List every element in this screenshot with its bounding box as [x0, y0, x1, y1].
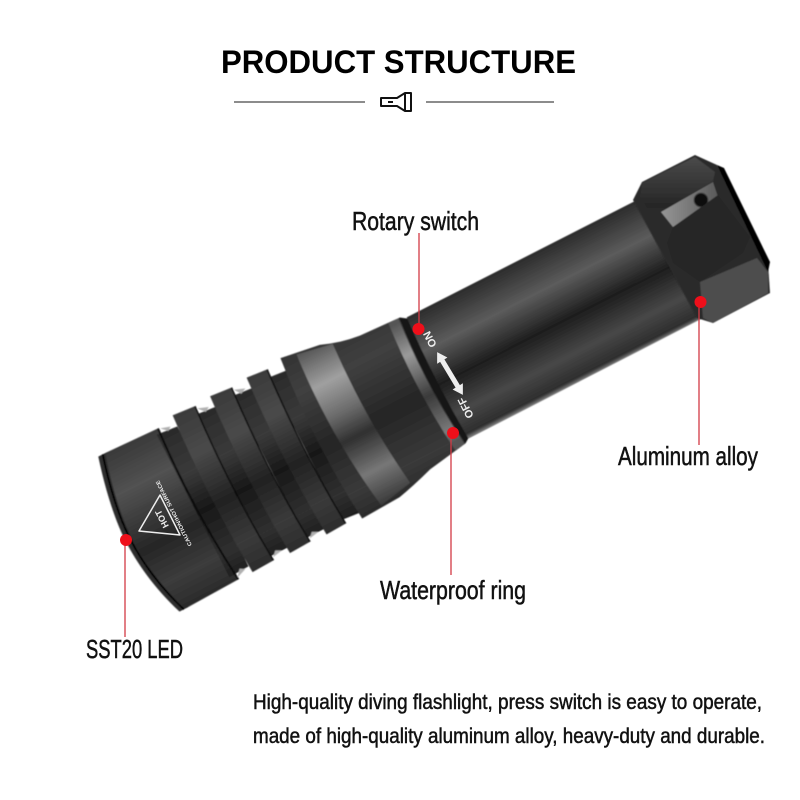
callout: aluminum alloy: Aluminum alloy [618, 441, 758, 471]
flashlight tail bezel [633, 155, 770, 323]
callout: waterproof ring: Waterproof ring [380, 575, 526, 605]
callout: aluminum alloy [618, 296, 758, 471]
description text [253, 690, 765, 748]
title: PRODUCT STRUCTURE [221, 44, 576, 80]
icon: on-off arrow [432, 349, 468, 398]
callout: SST20 LED: SST20 LED [86, 634, 183, 664]
text: caution hot surface: CAUTION!HOT SURFACE [155, 479, 194, 547]
callout: SST20 LED [86, 534, 183, 664]
callout: waterproof ring [380, 427, 526, 605]
text: OFF: OFF [456, 395, 477, 420]
callout: rotary switch: Rotary switch [352, 206, 479, 236]
icon: hazard triangle [139, 495, 180, 535]
callout: rotary switch [352, 206, 479, 335]
icon: hazard triangle: HOT [153, 508, 171, 530]
text: ON: ON [421, 329, 440, 349]
icon: flashlight [381, 93, 411, 111]
title ornament with flashlight icon [234, 93, 554, 111]
flashlight product photo [84, 155, 770, 619]
